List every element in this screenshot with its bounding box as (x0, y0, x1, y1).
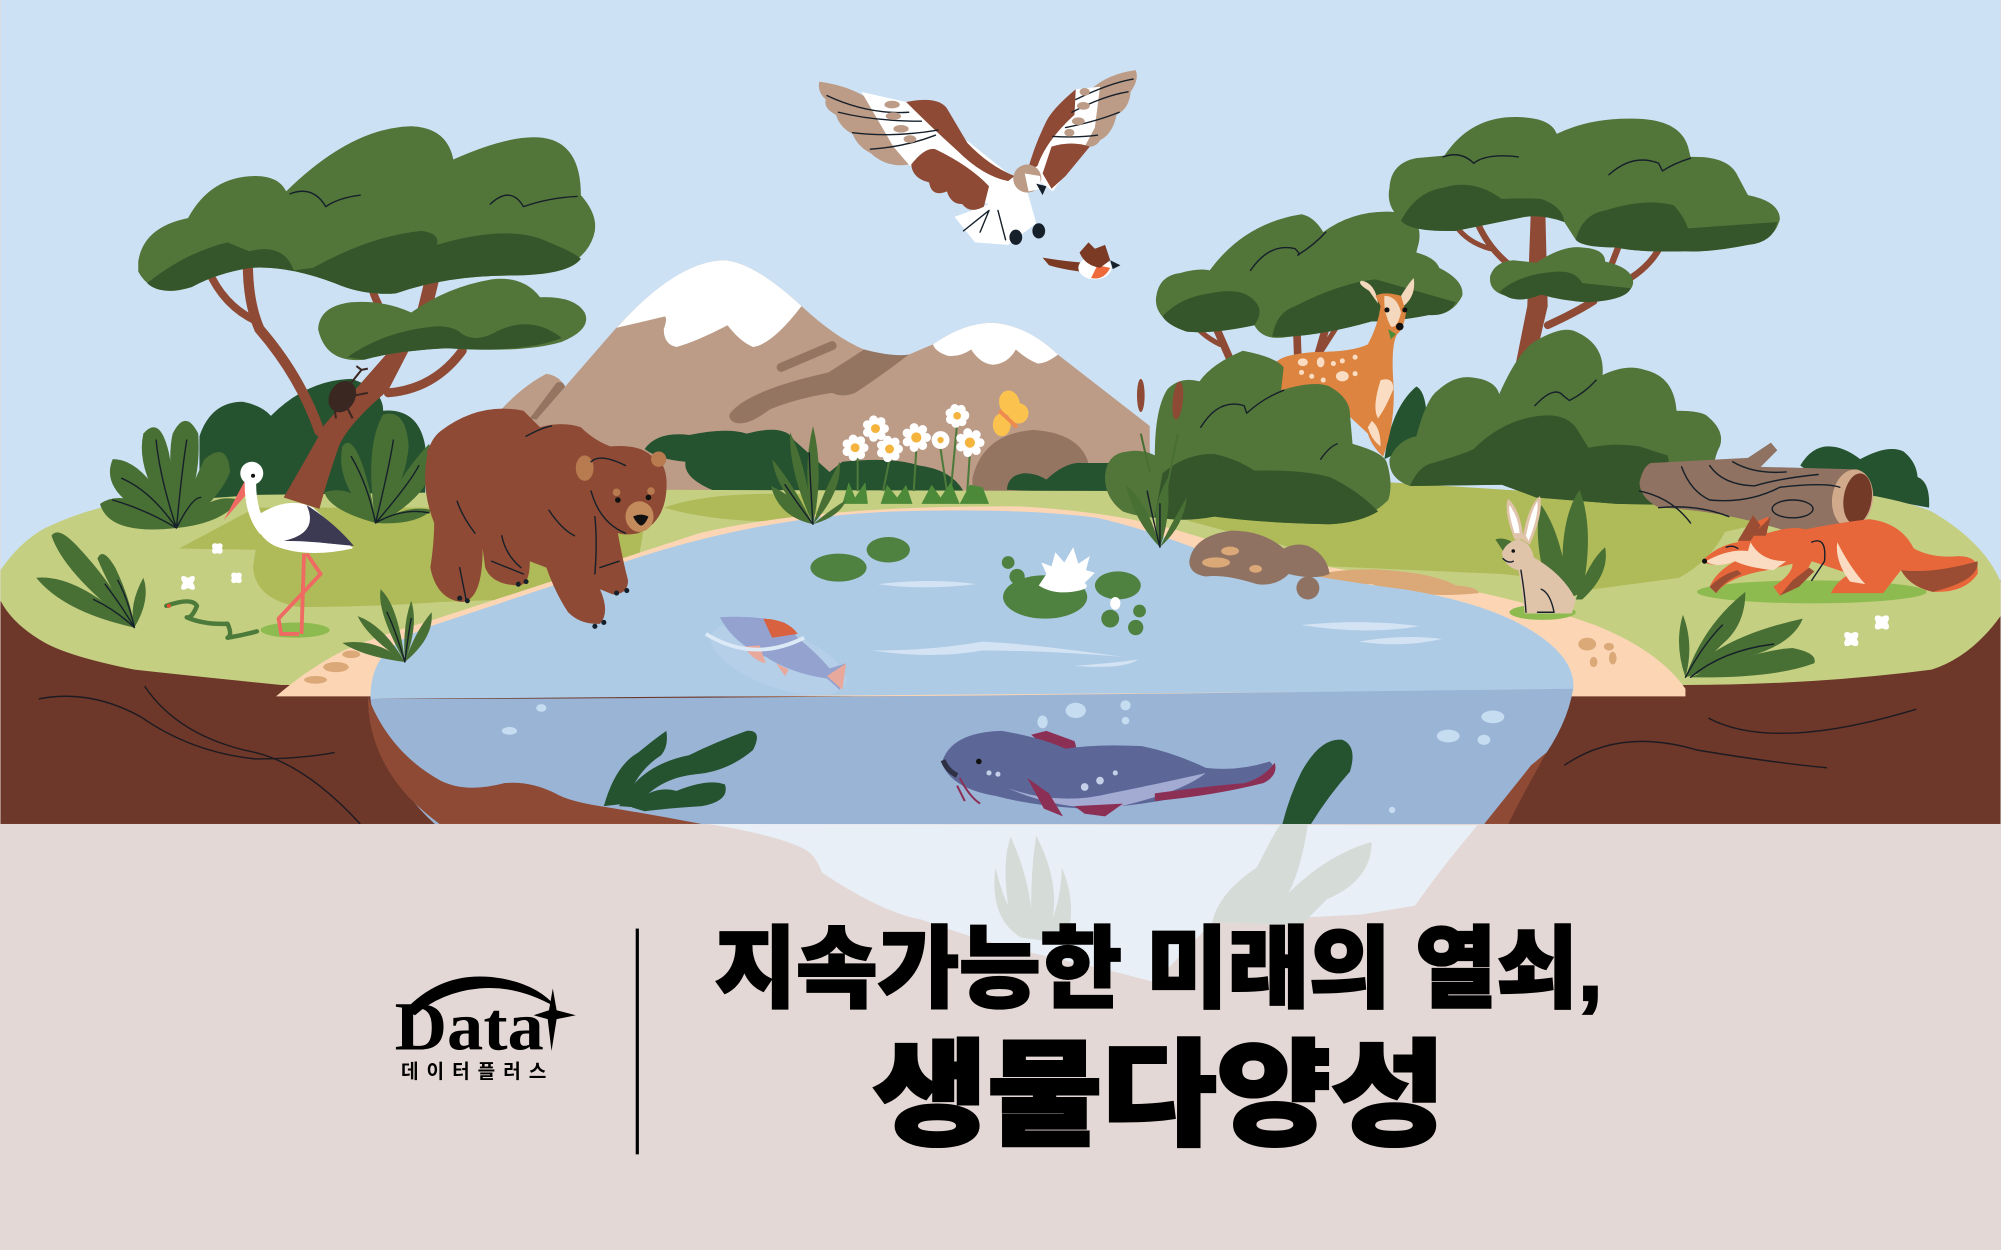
catfish (942, 731, 1276, 816)
logo word: Data (395, 989, 544, 1065)
white blossoms left (181, 543, 242, 590)
plant bottom left (36, 532, 146, 628)
plant bottom right (1679, 592, 1815, 677)
sand shore (276, 506, 1685, 696)
left tree trunk (208, 255, 462, 509)
fox (1697, 515, 1978, 603)
faded seaweed (994, 824, 1372, 944)
title line two: 생물다양성 (873, 1032, 1446, 1160)
stork (224, 462, 354, 638)
eagle (819, 70, 1137, 245)
pond surface (370, 510, 1573, 699)
bottom panel background (0, 824, 2000, 1250)
seaweed left (604, 731, 757, 811)
brown bear (425, 409, 667, 629)
lily pads (810, 537, 1146, 635)
plant near shore (342, 589, 432, 662)
water lily flower (1039, 547, 1095, 592)
water ripples (873, 581, 1442, 667)
pond underwater (370, 689, 1573, 829)
title line one: 지속가능한 미래의 열쇠, (715, 919, 1603, 1019)
left tree lower canopy (318, 279, 586, 360)
sand pebbles (304, 569, 1617, 684)
cattail reeds (1126, 379, 1187, 547)
logo (395, 976, 576, 1083)
seaweed right (1281, 740, 1353, 829)
soil bank light (368, 696, 1546, 829)
plant at pond top (771, 426, 846, 524)
grass island (0, 490, 2000, 685)
left tree canopy (138, 126, 595, 294)
divider (636, 929, 639, 1154)
mid tree canopy (1156, 212, 1462, 338)
white blossoms right (1842, 613, 1891, 649)
meadow flowers (842, 408, 989, 504)
sky (0, 0, 2000, 580)
mid tree branches (1198, 330, 1338, 360)
plant behind rabbit (1495, 490, 1606, 605)
right tree small canopy (1490, 247, 1633, 302)
logo korean name: 데이터플러스 (401, 1061, 546, 1083)
beetle (323, 366, 368, 418)
right bush (1389, 330, 1721, 505)
butterfly (993, 388, 1029, 436)
robin (1043, 242, 1120, 279)
soil cracks (39, 686, 1916, 824)
mountains (492, 260, 1150, 504)
logo star (534, 989, 576, 1051)
log (1640, 443, 1877, 532)
bubbles (502, 700, 1504, 813)
illustration: pond ecosystem (0, 0, 2000, 829)
right tree trunk (1456, 216, 1662, 362)
faded pond silhouette (708, 824, 1478, 982)
salmon (705, 616, 846, 690)
mid bush (1105, 351, 1391, 524)
grass shading (179, 482, 1863, 607)
soil (0, 580, 2000, 829)
right tree canopy (1389, 117, 1780, 252)
deer (1276, 278, 1414, 457)
plant left of stork (100, 421, 239, 530)
logo swoosh (405, 976, 557, 1015)
plant right of trunk (324, 414, 433, 523)
snake (166, 601, 257, 638)
rabbit (1502, 496, 1576, 620)
rock (1189, 531, 1330, 599)
background dark bushes (199, 379, 1929, 508)
